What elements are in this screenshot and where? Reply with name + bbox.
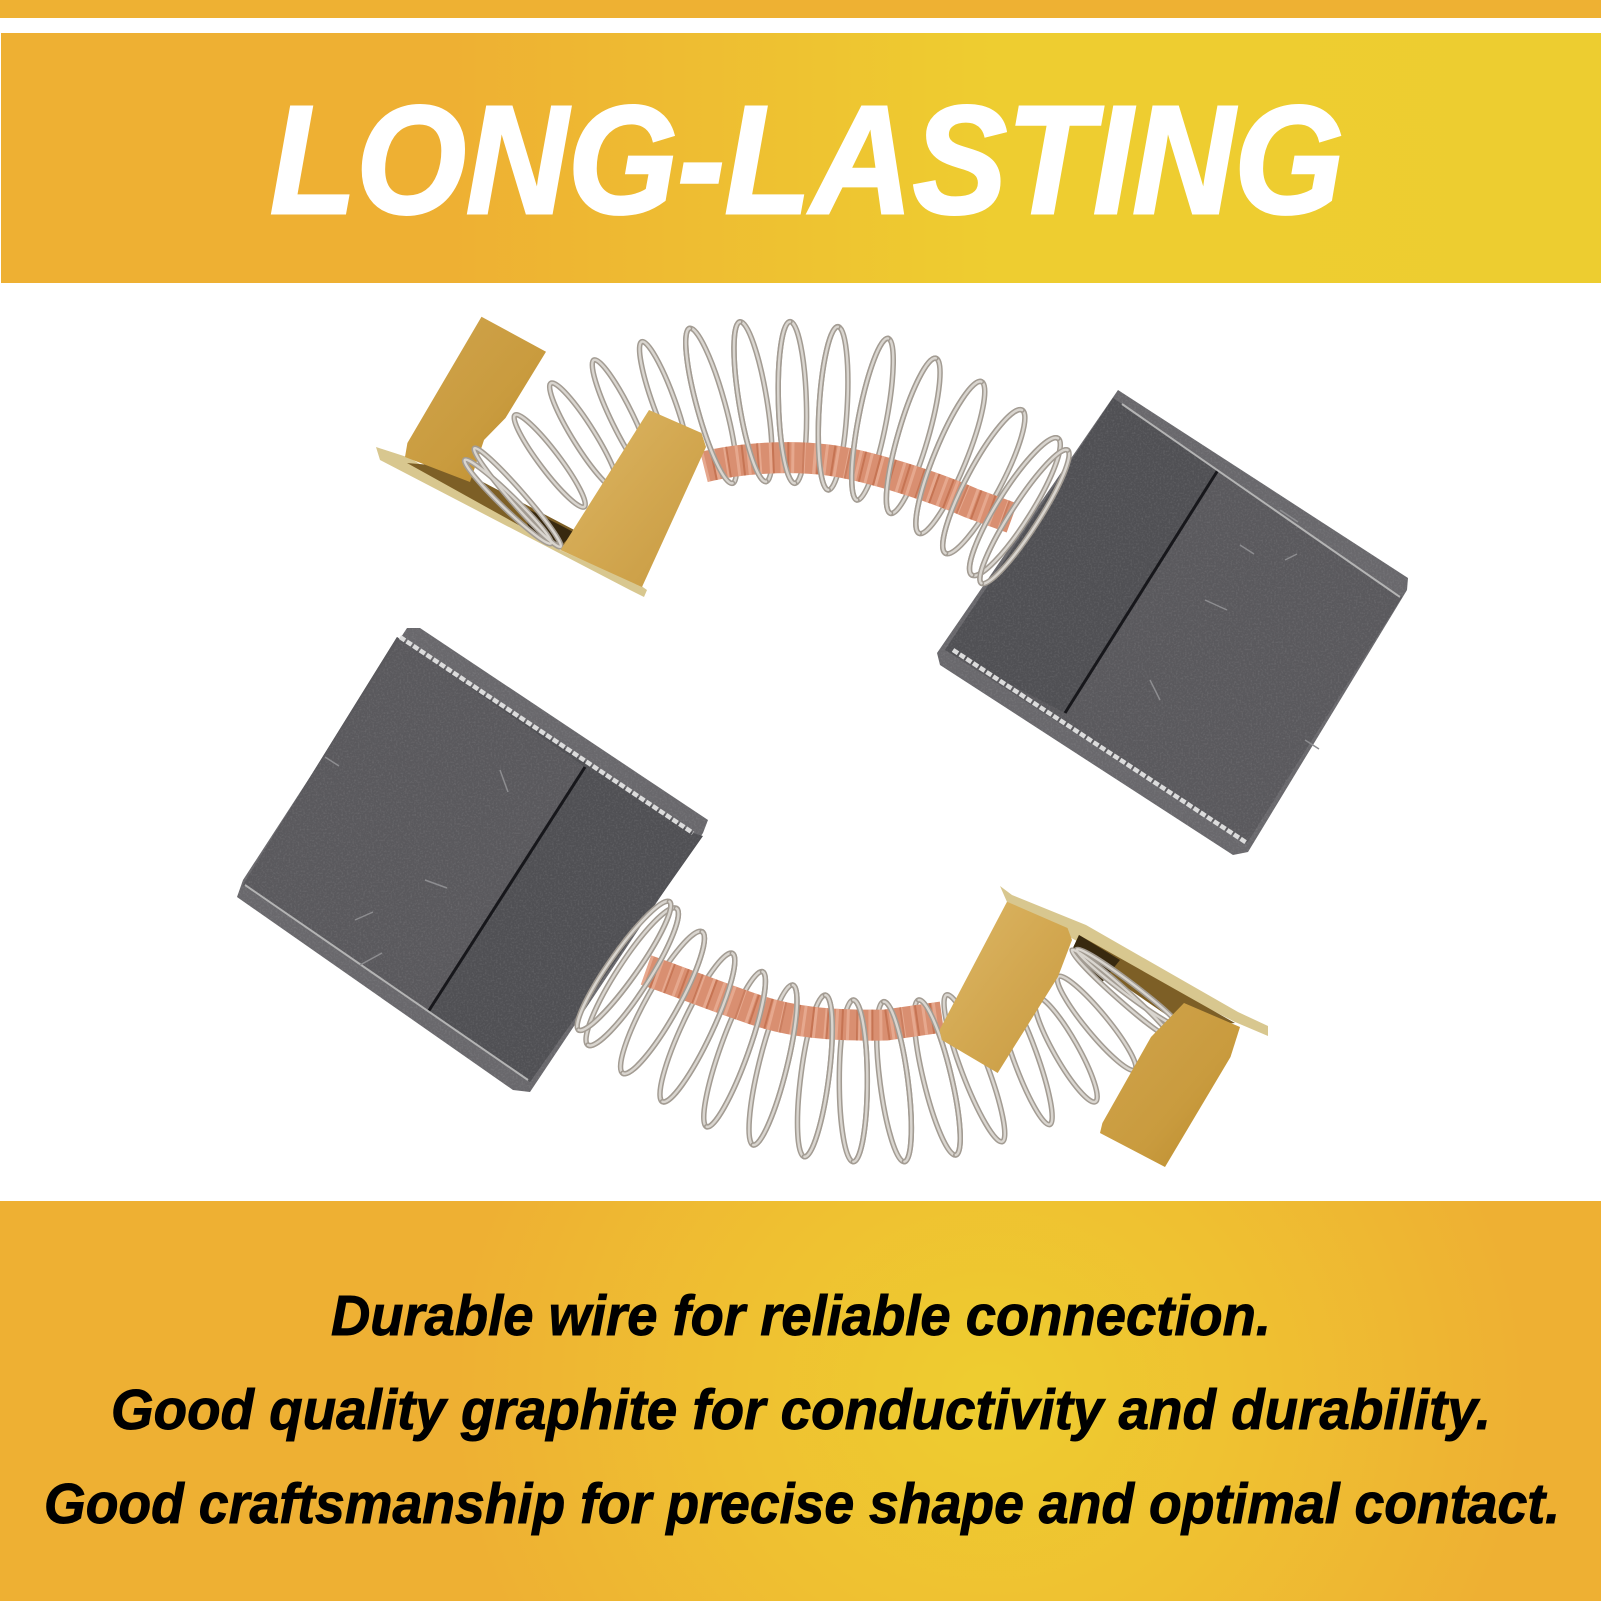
lower brush: brass terminal base <box>1000 886 1268 1036</box>
lower brush: spring front coils <box>579 902 969 1162</box>
header banner <box>1 33 1601 283</box>
product photo illustration: carbon brushes <box>237 317 1408 1167</box>
upper brush: spring front coils <box>676 322 1068 583</box>
lower brush: spring back coils <box>567 894 1183 1164</box>
lower brush: carbon block <box>237 628 708 1092</box>
feature line 1: Durable wire for reliable connection. <box>331 1284 1271 1348</box>
feature line 2: Good quality graphite for conductivity and durability. <box>111 1378 1491 1442</box>
lower brush: front brass tab <box>940 902 1072 1073</box>
upper brush: brass terminal base <box>376 317 647 597</box>
lower brush: rear brass tab <box>1100 1003 1240 1167</box>
upper brush: front brass tab <box>560 410 706 587</box>
lower brush: copper braid <box>646 970 942 1025</box>
upper brush: spring back coils <box>460 320 1079 591</box>
upper brush: carbon block <box>937 390 1408 855</box>
footer banner <box>0 1201 1601 1601</box>
upper brush: copper braid <box>704 458 1012 518</box>
top stripe <box>0 0 1601 18</box>
title: LONG-LASTING <box>270 74 1344 246</box>
